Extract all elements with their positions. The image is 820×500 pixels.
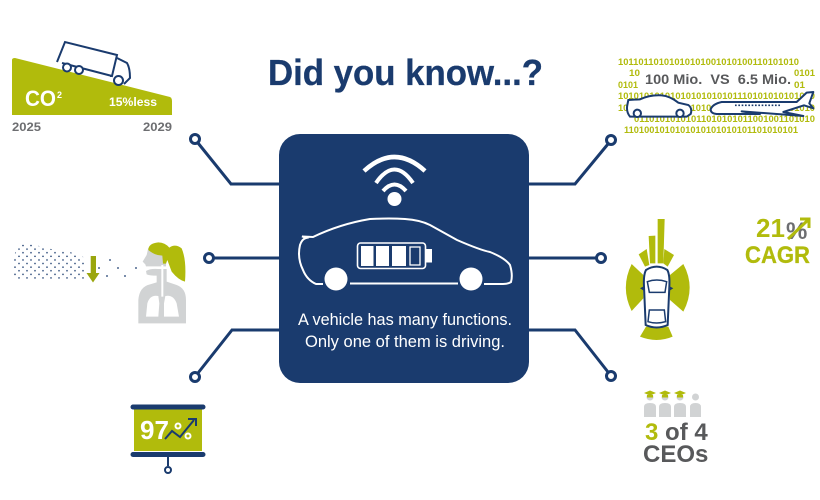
panel: 97% presentation (130, 404, 206, 473)
icon: down arrow (86, 256, 100, 282)
title: Did you know...? (268, 52, 543, 93)
icon: plane (711, 92, 813, 116)
year labels: 2029 (143, 120, 172, 134)
icon: people (644, 394, 701, 417)
sensor fields (626, 219, 690, 340)
connectors (190, 134, 616, 382)
panel: CO2 reduction (12, 42, 172, 134)
binary background: 01101010101011010101011001001101010 (634, 114, 815, 124)
binary background: 1101001010101010101010101101010101 (624, 125, 798, 135)
binary background: 01 (794, 80, 805, 90)
icon: car top view (642, 267, 671, 327)
97 figure: 97 (140, 415, 169, 445)
icon: head and lungs (138, 242, 186, 323)
percent mark (176, 424, 190, 438)
15% less label: 15%less (109, 97, 157, 109)
binary background: 10 (629, 68, 640, 78)
panel: central vehicle (279, 134, 529, 383)
binary background: 10101010101010101010101010101010101010 (618, 103, 815, 113)
year labels: 2025 (12, 120, 41, 134)
3 of 4 label: 3 of 4 (645, 419, 708, 446)
icon: wifi (364, 157, 425, 206)
binary background: 10101010101010101010101110101010101010 (618, 91, 815, 101)
panel: data comparison (618, 57, 815, 135)
icon: growth arrow (788, 219, 809, 239)
panel: 3 of 4 CEOs (643, 390, 708, 468)
icon: car outline (627, 95, 691, 117)
CO2 label: CO (25, 86, 56, 111)
binary background: 0101 (794, 68, 815, 78)
percentage figure: 21 (756, 213, 785, 243)
icon: car with battery (299, 218, 512, 290)
panel: 21% CAGR (745, 213, 810, 269)
CEOs label: CEOs (643, 441, 708, 468)
panel: autonomous sensors (626, 219, 690, 340)
central caption: A vehicle has many functions. (298, 311, 512, 329)
central caption: Only one of them is driving. (305, 333, 505, 351)
panel: 21% CAGR: % (786, 218, 807, 245)
CAGR label: CAGR (745, 242, 810, 269)
binary background (618, 57, 815, 135)
binary background: 0101 (618, 80, 638, 90)
icon: graduation caps (644, 390, 686, 398)
binary background: 10110110101010101001010100110101010 (618, 57, 799, 67)
panel: CO2 reduction: 2 (57, 90, 62, 100)
chart: declining wedge (12, 58, 172, 115)
particle cloud (13, 243, 86, 279)
icon: truck (57, 42, 130, 85)
hair (148, 242, 185, 282)
icon: trend arrow (165, 419, 196, 439)
panel: particulate emissions (13, 242, 186, 323)
comparison label: 100 Mio. VS 6.5 Mio. (645, 71, 791, 87)
